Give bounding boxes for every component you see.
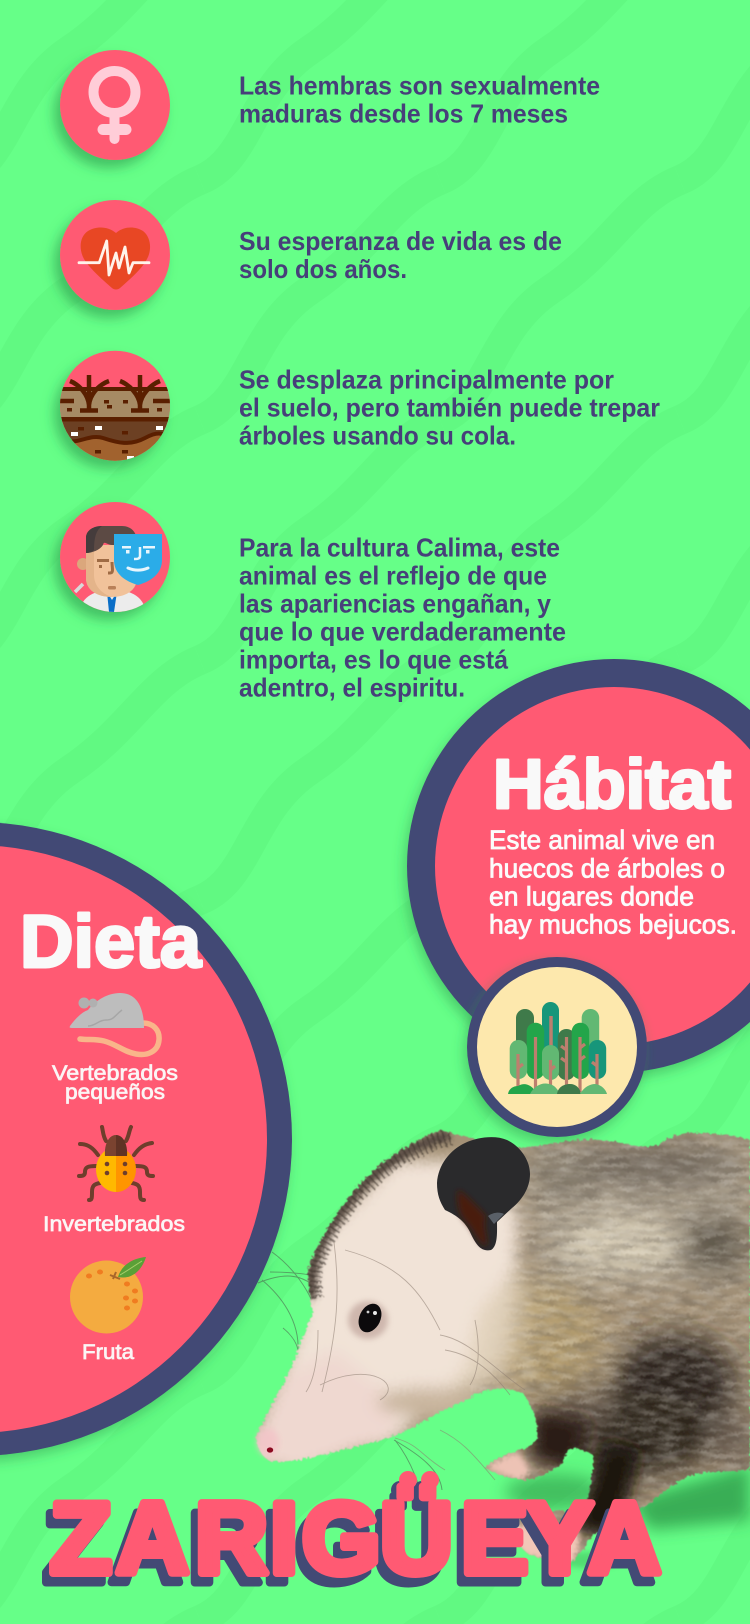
text: Calima culture: importa, es lo que está xyxy=(239,644,509,674)
label: small vertebrates: pequeños xyxy=(65,1081,165,1104)
panel: habitat circle xyxy=(407,659,750,1137)
eye xyxy=(348,1300,388,1339)
habitat description: en lugares donde xyxy=(489,882,694,912)
text: movement xyxy=(239,364,660,450)
feet xyxy=(485,1452,530,1482)
text: maturity: maduras desde los 7 meses xyxy=(239,99,568,129)
text: Calima culture xyxy=(239,532,566,702)
text: life expectancy: solo dos años. xyxy=(239,254,407,284)
icon: forest badge xyxy=(467,957,647,1137)
text: Calima culture: Para la cultura Calima, este xyxy=(239,532,560,562)
text: life expectancy: Su esperanza de vida es de xyxy=(239,226,562,256)
habitat description: huecos de árboles o xyxy=(489,854,725,884)
text: Calima culture: animal es el reflejo de que xyxy=(239,560,547,590)
label: small vertebrates: Vertebrados xyxy=(52,1062,178,1085)
title: ZARIGÜEYA: ZARIGÜEYA xyxy=(43,1492,654,1604)
label: invertebrates: Invertebrados xyxy=(43,1213,185,1236)
panel: diet circle xyxy=(0,822,292,1456)
label: fruit: Fruta xyxy=(82,1341,134,1364)
icon: beetle xyxy=(79,1127,153,1200)
heading: Hábitat: Hábitat xyxy=(493,745,731,823)
icon: soil cross-section xyxy=(60,351,170,470)
title: ZARIGÜEYA: ZARIGÜEYA xyxy=(50,1483,661,1595)
text: maturity: Las hembras son sexualmente xyxy=(239,71,600,101)
text: Calima culture: adentro, el espiritu. xyxy=(239,672,465,702)
body fur xyxy=(240,1120,750,1580)
back whiskers xyxy=(258,1252,442,1500)
text: maturity xyxy=(239,71,600,129)
label: small vertebrates xyxy=(52,1062,178,1104)
text: movement: Se desplaza principalmente por xyxy=(239,364,614,394)
icon: orange xyxy=(70,1257,146,1334)
icon: person with blue mask xyxy=(60,502,170,612)
icon: female symbol xyxy=(60,50,170,160)
heading: Dieta: Dieta xyxy=(20,900,202,983)
nose xyxy=(257,1428,279,1456)
habitat description: hay muchos bejucos. xyxy=(489,910,737,940)
icon: heart with heartbeat xyxy=(60,200,170,310)
icon: mouse xyxy=(70,993,159,1054)
ear xyxy=(437,1137,530,1250)
opossum xyxy=(240,1120,750,1580)
text: movement: el suelo, pero también puede trepar xyxy=(239,392,660,422)
text: movement: árboles usando su cola. xyxy=(239,420,516,450)
ground shadows xyxy=(505,1465,750,1568)
text: Calima culture: las apariencias engañan, y xyxy=(239,588,552,618)
text: life expectancy xyxy=(239,226,562,284)
text: Calima culture: que lo que verdaderamente xyxy=(239,616,566,646)
habitat description: Este animal vive en xyxy=(489,825,715,855)
habitat description xyxy=(489,825,737,940)
whisker strands on face xyxy=(306,1242,525,1480)
